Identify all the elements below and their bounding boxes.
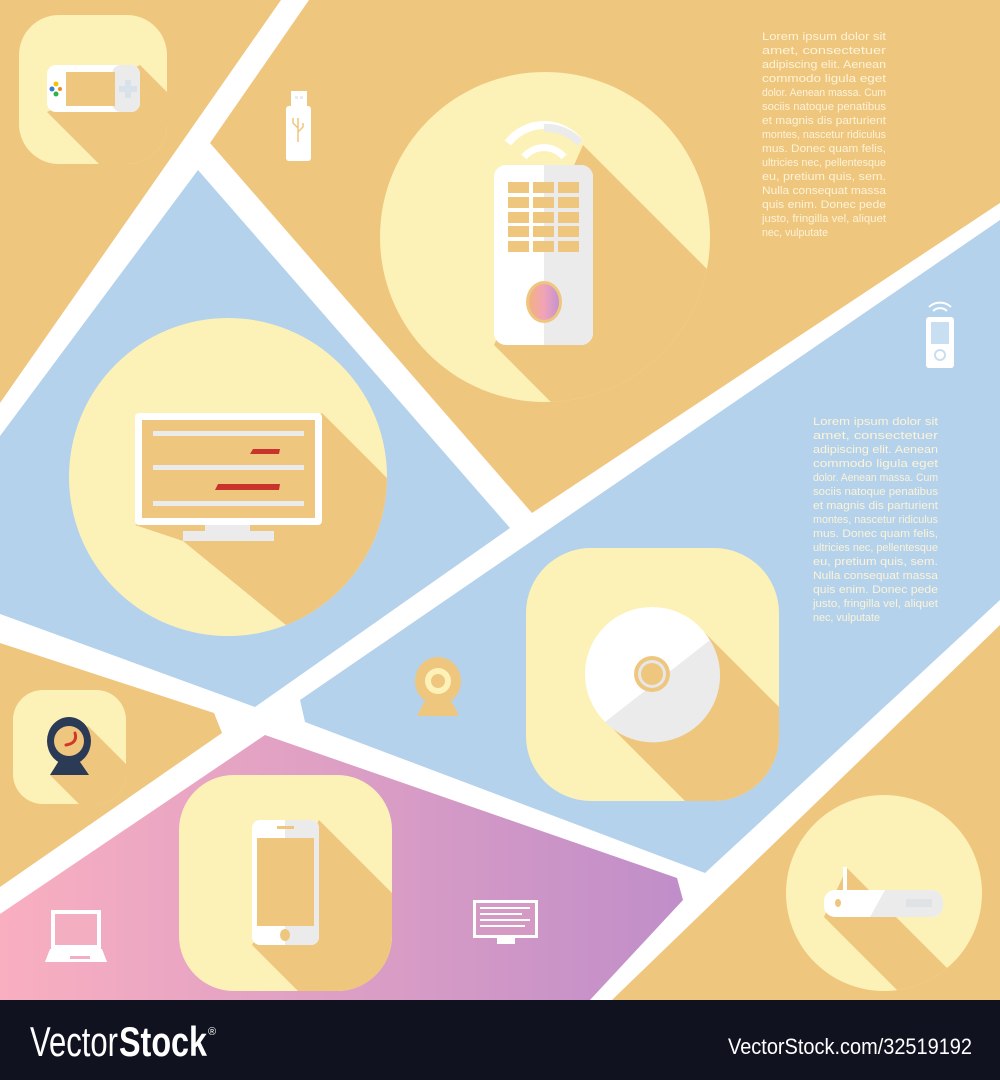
icon: desktop monitor	[135, 413, 322, 541]
icon: small webcam	[415, 657, 461, 716]
icon badge: disc	[526, 548, 779, 801]
text block: top lorem ipsum: nec, vulputate	[762, 227, 828, 239]
icon: cd disc	[585, 607, 720, 742]
footer url: VectorStock.com/32519192	[728, 1034, 972, 1059]
text block: middle lorem ipsum: et magnis dis parturient	[813, 500, 938, 512]
icon badge: webcam	[13, 690, 126, 804]
text block: top lorem ipsum: amet, consectetuer	[762, 45, 886, 57]
icon: smartphone	[252, 820, 319, 945]
panel: top-left orange (game console)	[0, 0, 281, 403]
footer bar	[0, 1000, 1000, 1080]
text block: top lorem ipsum: justo, fringilla vel, aliquet	[761, 213, 886, 225]
panel: bottom-right orange (router)	[612, 625, 1000, 1000]
text block: top lorem ipsum: adipiscing elit. Aenean	[762, 59, 886, 71]
text block: middle lorem ipsum: amet, consectetuer	[813, 430, 938, 442]
text block: middle lorem ipsum: montes, nascetur ridiculus	[813, 514, 938, 526]
text block: top lorem ipsum: commodo ligula eget	[762, 73, 886, 85]
text block: middle lorem ipsum: justo, fringilla vel, aliquet	[812, 598, 938, 610]
text block: top lorem ipsum: mus. Donec quam felis,	[762, 143, 886, 155]
icon badge: router	[786, 795, 982, 991]
icon: webcam	[47, 717, 91, 775]
icon badge: game console	[19, 15, 167, 164]
text block: top lorem ipsum: Nulla consequat massa	[762, 185, 887, 197]
panel: bottom-left orange (webcam)	[0, 643, 222, 887]
icon: usb stick	[286, 91, 311, 161]
text block: middle lorem ipsum: sociis natoque penatibus	[813, 486, 939, 498]
text block: top lorem ipsum: quis enim. Donec pede	[762, 199, 886, 211]
logo: VectorStock: ®	[208, 1026, 216, 1038]
text block: top lorem ipsum: ultricies nec, pellentesque	[762, 157, 886, 169]
text block: middle lorem ipsum: ultricies nec, pellentesque	[813, 542, 938, 554]
panel: left blue (monitor)	[0, 170, 510, 707]
icon: small remote	[926, 303, 954, 368]
text block: top lorem ipsum: sociis natoque penatibus	[762, 101, 887, 113]
text block: middle lorem ipsum: adipiscing elit. Aenean	[813, 444, 938, 456]
panel: top orange (remote control)	[210, 0, 1000, 513]
icon: wifi router	[824, 867, 943, 917]
text block: top lorem ipsum: montes, nascetur ridiculus	[762, 129, 886, 141]
logo: VectorStock	[30, 1018, 216, 1065]
text block: middle lorem ipsum: eu, pretium quis, sem.	[813, 556, 938, 568]
panel: bottom pink (phone)	[0, 735, 683, 1000]
icon badge: phone	[179, 775, 392, 991]
text block: top lorem ipsum: Lorem ipsum dolor sit	[762, 31, 886, 43]
icon: remote control	[494, 125, 593, 345]
icon: laptop	[45, 910, 107, 962]
text block: top lorem ipsum	[761, 31, 887, 239]
panel: right blue (disc)	[300, 220, 1000, 873]
text block: middle lorem ipsum: nec, vulputate	[813, 612, 880, 624]
logo: VectorStock: Vector	[30, 1018, 118, 1065]
text block: top lorem ipsum: dolor. Aenean massa. Cum	[762, 87, 886, 99]
text block: middle lorem ipsum: mus. Donec quam felis,	[813, 528, 938, 540]
text block: middle lorem ipsum: quis enim. Donec pede	[813, 584, 938, 596]
text block: middle lorem ipsum: Nulla consequat massa	[813, 570, 939, 582]
icon badge: monitor circle	[69, 318, 387, 636]
text block: middle lorem ipsum	[812, 416, 939, 624]
icon badge: big remote circle	[380, 72, 710, 402]
text block: middle lorem ipsum: Lorem ipsum dolor sit	[813, 416, 938, 428]
icon: handheld game console	[47, 65, 140, 112]
text block: top lorem ipsum: eu, pretium quis, sem.	[762, 171, 886, 183]
text block: middle lorem ipsum: commodo ligula eget	[813, 458, 938, 470]
logo: VectorStock: Stock	[119, 1018, 207, 1065]
text block: top lorem ipsum: et magnis dis parturient	[762, 115, 886, 127]
icon: small monitor	[473, 900, 538, 944]
text block: middle lorem ipsum: dolor. Aenean massa. Cum	[813, 472, 938, 484]
